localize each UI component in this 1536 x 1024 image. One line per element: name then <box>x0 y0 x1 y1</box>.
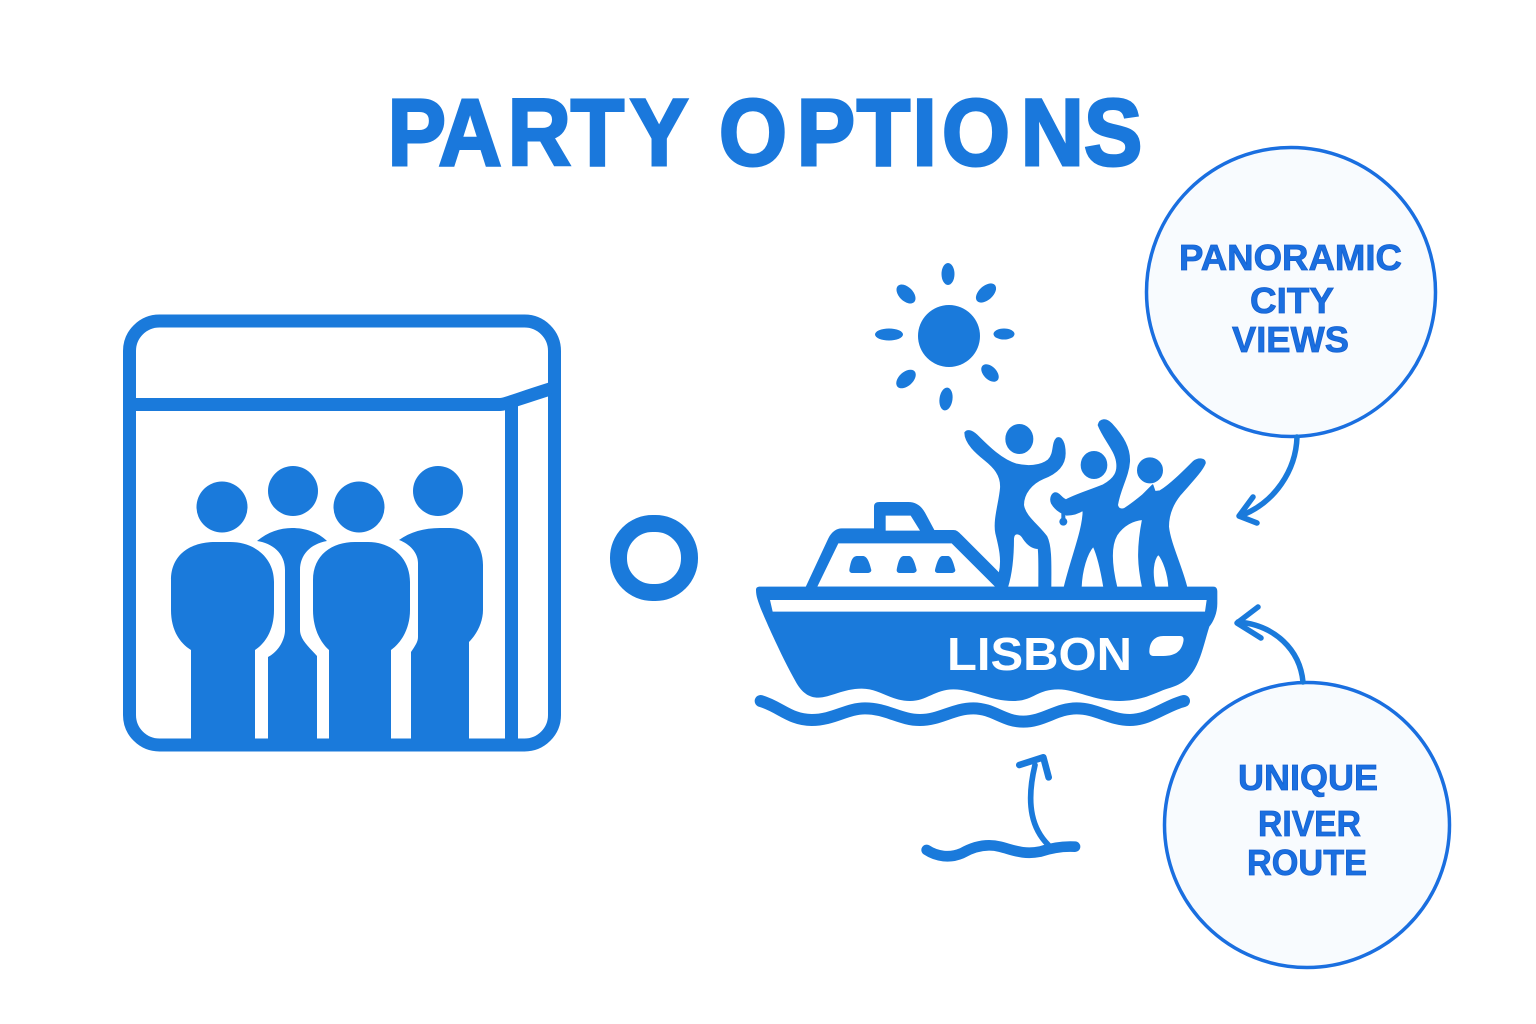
callout: panoramic city views: CITY <box>1250 280 1334 321</box>
icon: small wave with up arrow <box>927 757 1075 856</box>
hull porthole <box>1149 636 1184 656</box>
icon: party room with group of people <box>130 321 554 745</box>
arrow: panoramic callout to boat <box>1239 437 1297 523</box>
boat cabin <box>805 502 1000 588</box>
icon: party boat named Lisbon <box>756 420 1217 722</box>
callout: unique river route: ROUTE <box>1247 842 1367 883</box>
callout: unique river route <box>1164 682 1450 968</box>
cabin windows <box>849 556 871 573</box>
dancer 1 <box>965 425 1065 587</box>
callout: unique river route: RIVER <box>1258 803 1361 844</box>
callout: panoramic city views: VIEWS <box>1232 319 1349 360</box>
callout: panoramic city views: PANORAMIC <box>1179 237 1402 278</box>
group of four people <box>171 466 483 745</box>
boat name: LISBON <box>947 628 1132 680</box>
boat hull <box>756 587 1217 701</box>
icon: sun <box>875 263 1014 411</box>
title: PARTY OPTIONS <box>388 80 1142 186</box>
callout: panoramic city views <box>1146 148 1436 436</box>
water wave <box>761 701 1184 722</box>
icon: ring separator <box>618 524 690 592</box>
callout: unique river route: UNIQUE <box>1238 757 1378 798</box>
arrow: river route callout to boat <box>1237 607 1303 682</box>
dancers 2 and 3 <box>1051 420 1205 587</box>
room frame <box>130 321 554 745</box>
